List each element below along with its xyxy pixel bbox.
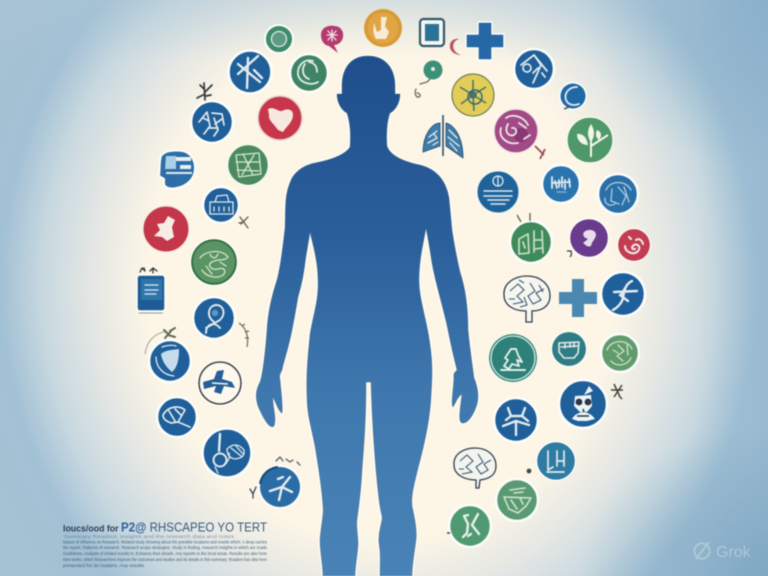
icon: blue tally — [536, 442, 576, 480]
watermark: Grok — [694, 542, 752, 561]
icon: blue abstract symbol — [514, 49, 554, 89]
icon: green pelvis badge — [496, 469, 538, 521]
icon: brain with stem — [504, 276, 550, 322]
text block: caption — [63, 520, 267, 569]
icon: book — [137, 268, 165, 313]
icon: blue pelvis — [494, 398, 538, 442]
icon: blue leaf shield — [145, 328, 191, 382]
caption body lines: presented for its readers. Any results — [63, 563, 145, 569]
icon: blue medical kit — [203, 187, 239, 223]
icon: blue leaf — [157, 397, 197, 437]
icon: blue crescent ring — [560, 82, 586, 110]
icon: red heart — [258, 96, 302, 140]
icon: teal mouth — [551, 331, 587, 367]
watermark: Grok: Grok — [716, 544, 752, 561]
icon: lungs — [423, 115, 463, 158]
icon: green square pattern — [228, 144, 268, 186]
icon: red spiral — [618, 228, 650, 262]
icon: red organ — [143, 206, 189, 252]
icon: black sprig small — [239, 217, 248, 228]
caption body lines: Guidelines. Analysis of related results in. Enhance their details. Any reports to the local areas. Results are also here — [63, 551, 267, 557]
icon: blue network — [250, 457, 302, 508]
icon: head profile — [159, 151, 195, 188]
icon: green ring — [265, 25, 293, 53]
icon: pink crescent — [450, 39, 461, 55]
human body silhouette — [256, 56, 478, 576]
icon: brown scribble arc — [239, 323, 249, 347]
icon: blue bird — [601, 272, 645, 316]
icon: pink speech bubble — [321, 26, 343, 53]
caption body lines — [63, 534, 267, 569]
caption body lines: Summary Readout, Insights and the research data and notes — [64, 534, 235, 540]
icon: green balloon — [415, 60, 442, 97]
icon: small brain — [454, 448, 496, 488]
icon: green apple — [290, 54, 328, 92]
icon: medical plus light — [559, 279, 597, 317]
icon: green swirl — [601, 334, 639, 372]
icon: green plant — [567, 117, 613, 163]
icon: blue text badge two — [542, 165, 580, 203]
icon: square frame — [420, 19, 444, 46]
icon: blue fingerprint — [598, 174, 638, 214]
icon: purple shell — [567, 218, 608, 258]
icon: blue body scribble — [191, 101, 233, 143]
icon: green bone — [447, 505, 491, 547]
icon: blue face mask — [559, 380, 607, 428]
icon: medical plus dark — [466, 22, 504, 60]
icon: green double panel — [510, 213, 552, 263]
icon: blue figure — [228, 50, 272, 94]
caption body lines: the report. Patterns of research. Research scope strategies. Study in finding, research insights in which are made — [63, 545, 267, 551]
icon: blue person ring — [193, 297, 235, 339]
icon: blue bone and shell — [202, 428, 252, 478]
icon: black sprig — [197, 83, 212, 100]
icon: teal tree badge — [488, 334, 538, 382]
caption heading: Ioucs/ood for P2@ RHSCAPEO YO TERT — [63, 520, 267, 534]
icon: black insect — [611, 384, 623, 399]
caption body lines: New works, which Researchers improve the outcomes and studies and its details in this summary. Readers has also here — [63, 557, 267, 563]
icon: blue text badge one — [477, 171, 519, 213]
icon: magenta swirl — [494, 109, 545, 159]
icon: green maze — [190, 238, 238, 286]
icon: gold medallion — [364, 9, 402, 47]
caption body lines: Nature of Influence on Research. Related study showing about the possible locations and results which. A deep carries — [63, 540, 267, 546]
icon: yellow citrus — [452, 74, 494, 116]
icon: white bone circle — [197, 360, 243, 406]
